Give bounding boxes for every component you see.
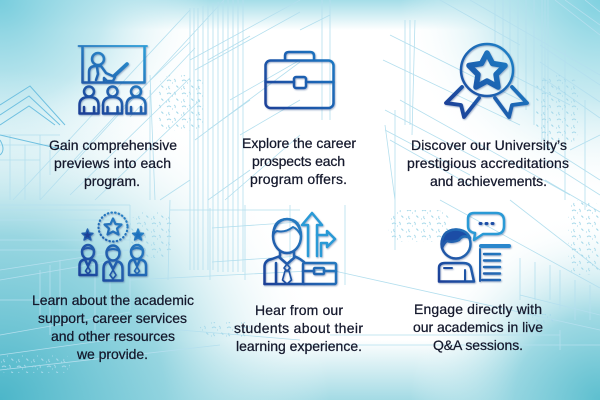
caption: support: we provide. <box>76 346 148 362</box>
caption: accreditations <box>407 137 569 189</box>
caption: career: prospects each <box>252 153 345 169</box>
caption: Q&A: Q&A sessions. <box>433 337 523 353</box>
caption: accreditations: and achievements. <box>430 173 547 189</box>
icon: academic with speech bubble and notes <box>439 213 509 282</box>
panel: live Q&A <box>413 213 543 353</box>
panel: support and resources <box>32 212 194 362</box>
caption: students: students about their <box>234 320 363 336</box>
caption: support: and other resources <box>51 328 175 344</box>
caption: previews: previews into each <box>54 155 171 171</box>
panel: accreditations <box>407 44 569 189</box>
icon: presenter at board with audience <box>78 46 147 114</box>
caption: accreditations: Discover our University’s <box>411 137 567 153</box>
caption: support: Learn about the academic <box>32 292 194 308</box>
panel: program previews <box>49 46 177 189</box>
caption: accreditations: prestigious accreditations <box>407 155 569 171</box>
caption: Q&A <box>413 301 543 353</box>
icon: award rosette with star <box>446 44 527 117</box>
caption: career: Explore the career <box>242 135 356 151</box>
caption: previews: program. <box>84 173 140 189</box>
caption: students: Hear from our <box>255 302 343 318</box>
caption: career: program offers. <box>250 171 347 187</box>
caption: support <box>32 292 194 362</box>
caption: career <box>242 135 356 187</box>
panel: student experience <box>234 213 363 354</box>
caption: students <box>234 302 363 354</box>
icon: briefcase <box>266 52 334 108</box>
caption: Q&A: our academics in live <box>413 319 543 335</box>
caption: students: learning experience. <box>236 338 362 354</box>
caption: previews: Gain comprehensive <box>49 137 177 153</box>
caption: previews <box>49 137 177 189</box>
icon: student with arrows and briefcase <box>264 213 336 284</box>
caption: Q&A: Engage directly with <box>414 301 542 317</box>
icon: three people with stars <box>80 212 146 280</box>
caption: support: support, career services <box>38 310 187 326</box>
panel: career prospects <box>242 52 356 187</box>
